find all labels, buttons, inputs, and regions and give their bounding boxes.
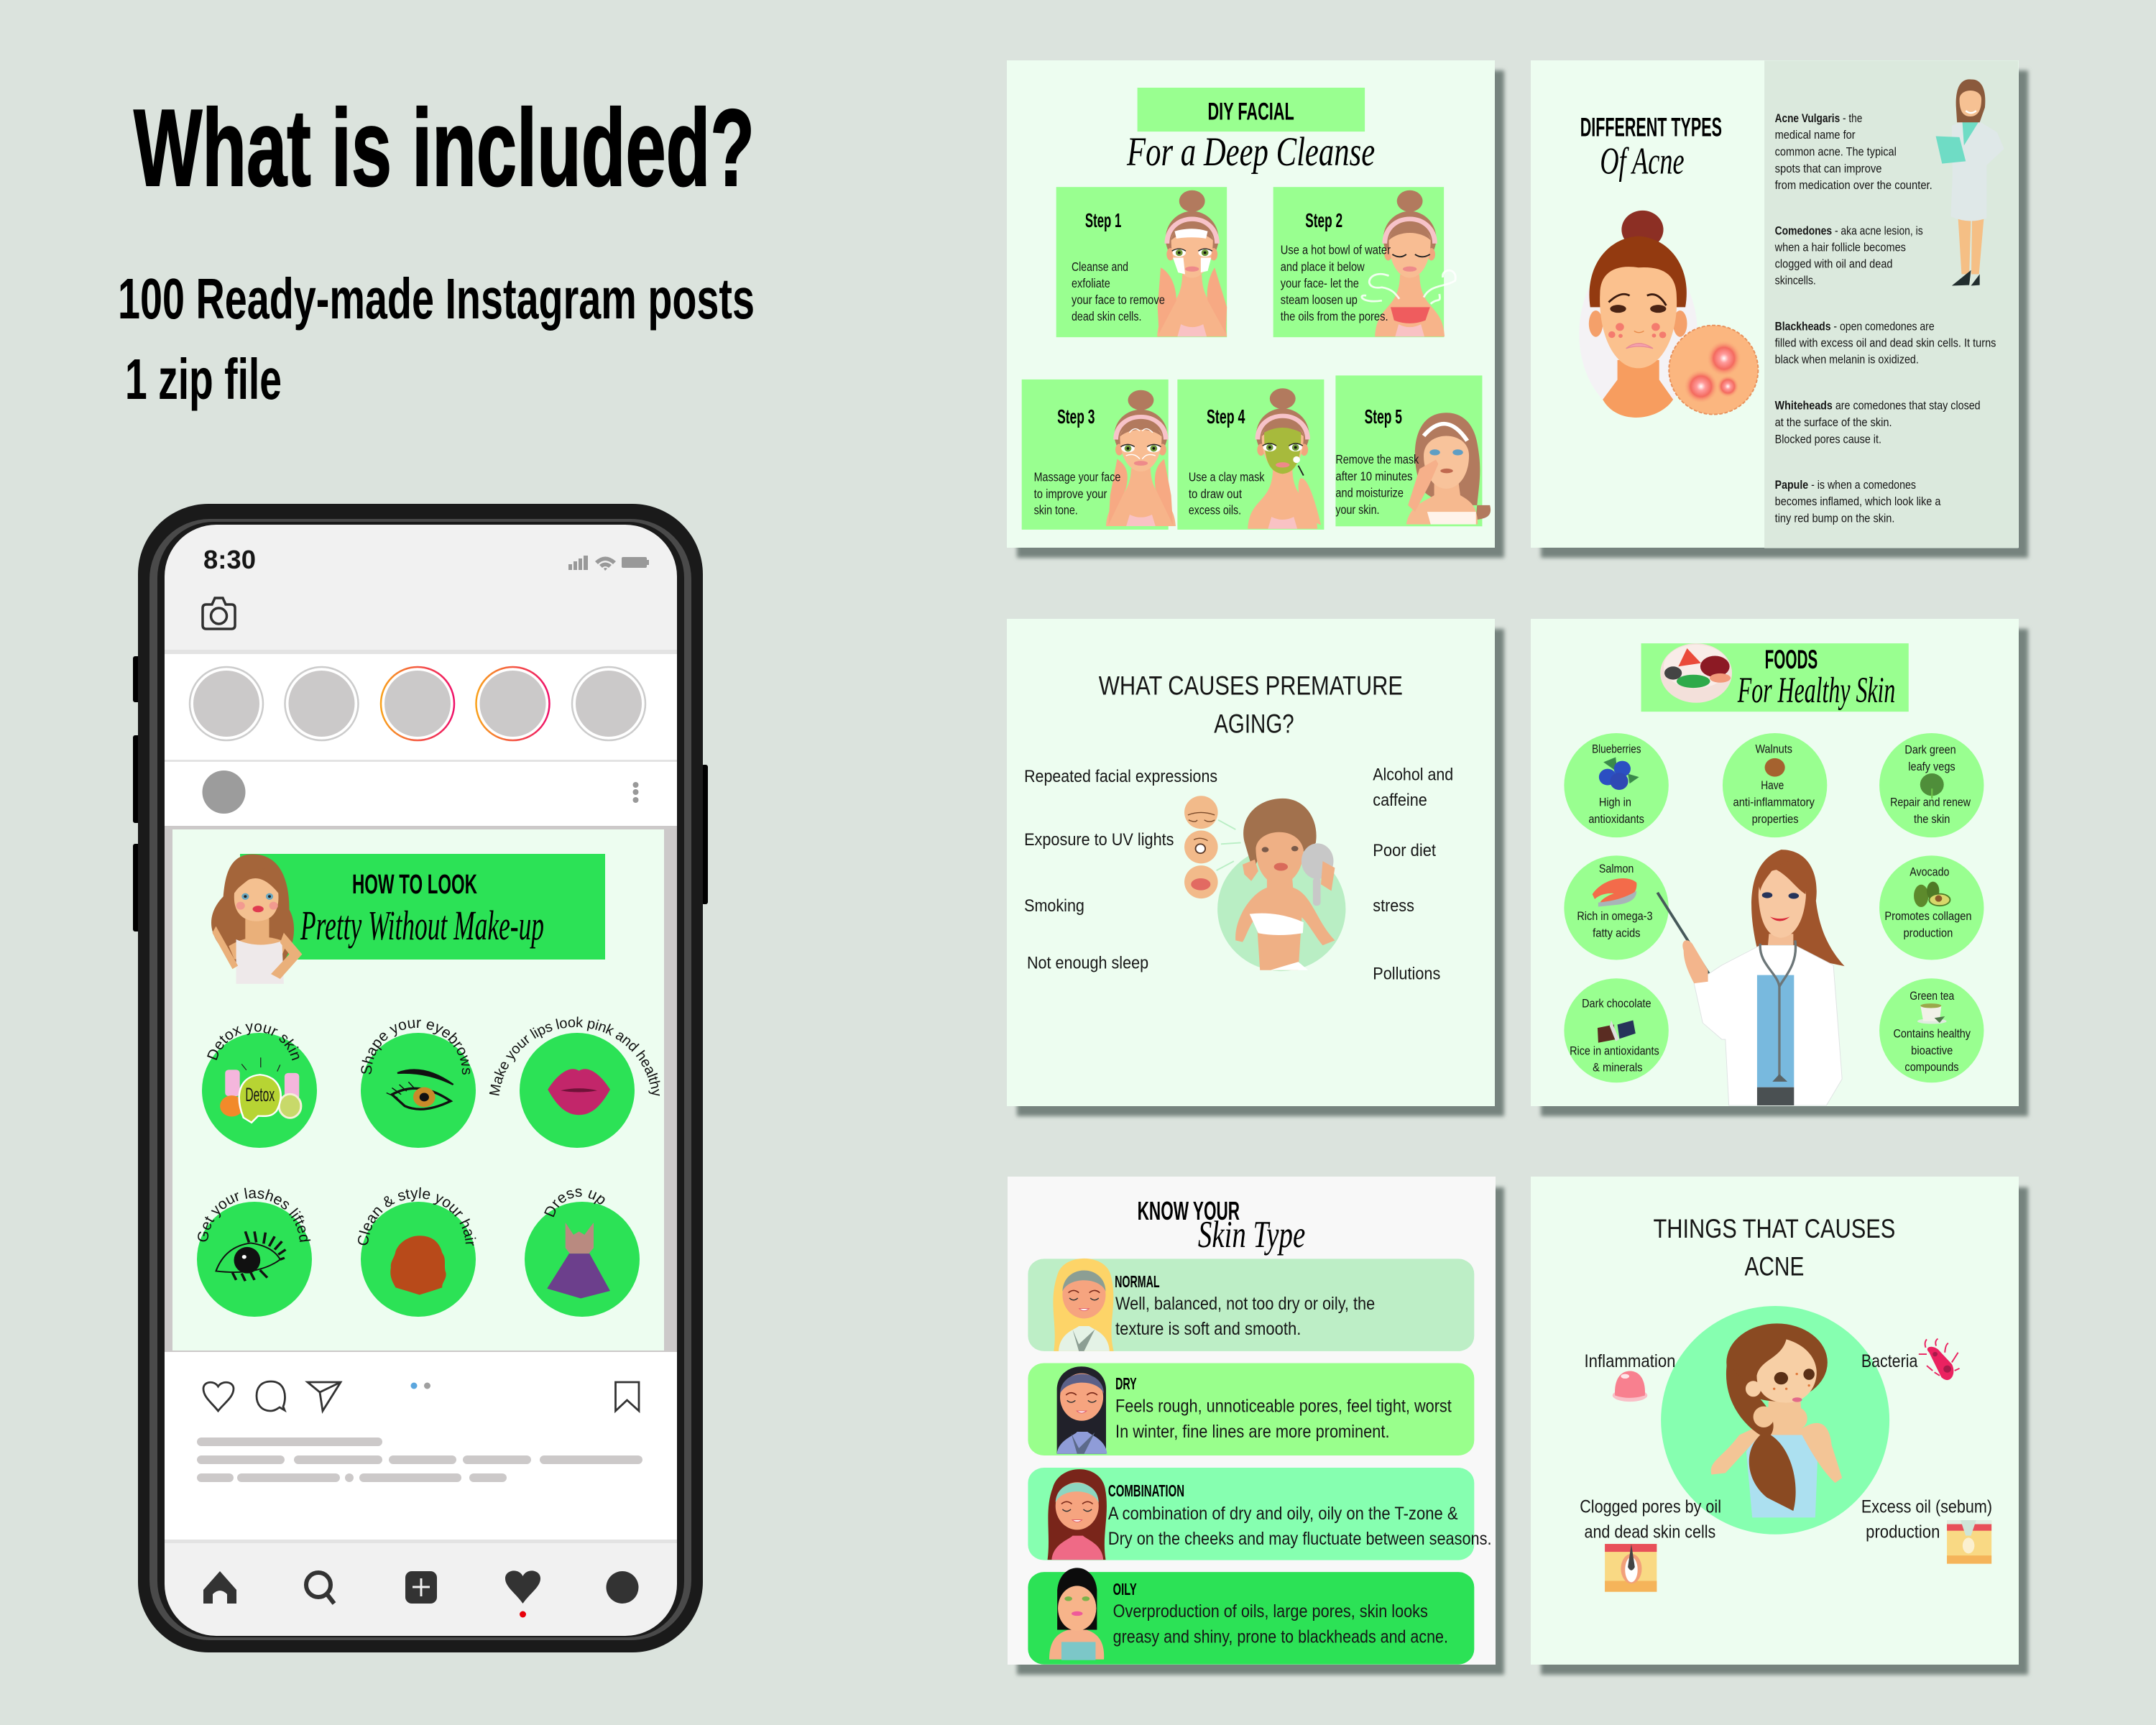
definitions: Blocked pores cause it. xyxy=(1775,433,1881,446)
step 2: and place it below xyxy=(1281,259,1365,274)
panel: things that cause acne xyxy=(1531,1177,2028,1675)
step 5: Step 5 xyxy=(1365,406,1402,428)
step 2: the oils from the pores. xyxy=(1281,310,1388,323)
script heading: For Healthy Skin xyxy=(1737,671,1895,711)
causes left xyxy=(1024,768,1217,972)
step 5: and moisturize xyxy=(1335,486,1404,500)
panel: premature aging xyxy=(1007,619,1504,1116)
definitions: tiny red bump on the skin. xyxy=(1775,512,1894,525)
circle: hair xyxy=(358,1187,476,1317)
food: dark chocolate: Dark chocolate xyxy=(1582,997,1651,1010)
circle: eyebrows xyxy=(361,1019,476,1148)
food: leafy vegs: Dark green xyxy=(1904,743,1956,756)
row: oily: greasy and shiny, prone to blackheads and acne. xyxy=(1113,1627,1448,1647)
subtitle: zip file: 1 zip file xyxy=(125,347,282,411)
food: leafy vegs: Repair and renew xyxy=(1890,796,1971,809)
step 1: Step 1 xyxy=(1085,210,1121,232)
post banner heading: HOW TO LOOK xyxy=(352,870,477,900)
definitions: becomes inflamed, which look like a xyxy=(1775,494,1941,508)
row: dry: Feels rough, unnoticeable pores, feel tight, worst xyxy=(1115,1397,1452,1416)
causes right xyxy=(1373,765,1453,983)
food: blueberries: antioxidants xyxy=(1588,812,1644,826)
illustration: doctor with pointer xyxy=(1657,850,1845,1105)
food: green tea xyxy=(1879,978,1984,1082)
heading: THINGS THAT CAUSES xyxy=(1653,1215,1895,1244)
step 5: after 10 minutes xyxy=(1335,469,1413,483)
circle: dress xyxy=(525,1189,640,1317)
row: normal: NORMAL xyxy=(1115,1273,1160,1292)
cause: bacteria xyxy=(1861,1338,1960,1380)
definitions: clogged with oil and dead xyxy=(1775,257,1892,271)
panel: know your skin type xyxy=(1008,1177,1504,1675)
food: blueberries: Blueberries xyxy=(1592,742,1641,755)
cause: clogged pores: Clogged pores by oil xyxy=(1580,1497,1721,1517)
screen xyxy=(165,525,677,1637)
food: blueberries xyxy=(1564,733,1669,837)
food: avocado: production xyxy=(1904,926,1953,939)
heading: ACNE xyxy=(1744,1253,1804,1282)
food: walnuts: properties xyxy=(1752,812,1799,826)
central circle xyxy=(1661,1306,1889,1535)
heading xyxy=(1099,672,1403,739)
food: salmon: Rich in omega-3 xyxy=(1577,909,1653,923)
row: dry xyxy=(1028,1363,1474,1455)
definitions: common acne. The typical xyxy=(1775,145,1897,158)
food: dark chocolate xyxy=(1564,978,1669,1082)
cause: clogged pores xyxy=(1580,1497,1721,1592)
definitions: filled with excess oil and dead skin cells. It turns xyxy=(1775,336,1996,349)
definitions: Acne Vulgaris - the xyxy=(1775,112,1862,125)
food: avocado: Promotes collagen xyxy=(1884,909,1972,923)
phone mockup xyxy=(133,504,708,1652)
bottom navigation icons xyxy=(203,1570,638,1617)
panel: foods for healthy skin xyxy=(1531,619,2028,1116)
step 2: Use a hot bowl of water xyxy=(1281,243,1391,257)
carousel dots xyxy=(411,1383,430,1389)
circle: lashes: Get your lashes lifted xyxy=(198,1187,310,1242)
row: dry: DRY xyxy=(1115,1376,1137,1394)
food: green tea: Contains healthy xyxy=(1893,1027,1971,1040)
step 3: Step 3 xyxy=(1057,406,1095,428)
post avatar xyxy=(203,770,246,814)
heading: FOODS xyxy=(1765,645,1818,675)
causes right: Poor diet xyxy=(1373,841,1436,860)
right column xyxy=(1764,60,2018,548)
step 2: steam loosen up xyxy=(1281,293,1358,307)
cause: excess oil xyxy=(1861,1497,1992,1564)
row: normal: Well, balanced, not too dry or oily, the xyxy=(1115,1294,1375,1314)
step 4 xyxy=(1177,380,1324,530)
definitions: Papule - is when a comedones xyxy=(1775,478,1916,492)
subtitle: posts count: 100 Ready-made Instagram posts xyxy=(118,267,755,331)
status time: 8:30 xyxy=(203,545,256,574)
step 5: Remove the mask xyxy=(1335,452,1419,466)
row: normal: texture is soft and smooth. xyxy=(1115,1320,1301,1339)
script heading: Of Acne xyxy=(1600,140,1685,182)
heading box xyxy=(1138,88,1365,132)
row: oily: OILY xyxy=(1113,1581,1137,1599)
food: walnuts: Have xyxy=(1761,778,1784,792)
step 4: Step 4 xyxy=(1207,406,1245,428)
food: green tea: bioactive xyxy=(1911,1044,1953,1057)
row: combination: A combination of dry and oily, oily on the T-zone & xyxy=(1108,1504,1458,1524)
caption placeholder bars xyxy=(197,1438,642,1482)
definitions: medical name for xyxy=(1775,129,1856,142)
food: salmon: Salmon xyxy=(1599,862,1634,875)
heading: AGING? xyxy=(1214,709,1294,739)
step 5 xyxy=(1335,375,1491,526)
food: avocado xyxy=(1879,855,1984,960)
food: walnuts: Walnuts xyxy=(1756,742,1792,755)
causes right: Alcohol and xyxy=(1373,765,1453,785)
step 1: dead skin cells. xyxy=(1072,310,1141,323)
food: dark chocolate: Rice in antioxidants xyxy=(1570,1044,1659,1057)
definitions: at the surface of the skin. xyxy=(1775,416,1892,429)
illustration: woman with mirror xyxy=(1184,796,1345,971)
definitions: skincells. xyxy=(1775,274,1816,288)
causes right: stress xyxy=(1373,897,1414,916)
side buttons xyxy=(133,656,708,932)
food: leafy vegs xyxy=(1879,733,1984,837)
cause: inflammation: Inflammation xyxy=(1585,1352,1676,1371)
title: What is included? xyxy=(134,87,755,209)
definitions: spots that can improve xyxy=(1775,162,1881,175)
causes left: Exposure to UV lights xyxy=(1024,831,1174,850)
food: salmon: fatty acids xyxy=(1593,926,1641,939)
food: green tea: compounds xyxy=(1904,1061,1959,1074)
illustration: girl with acne xyxy=(1711,1323,1842,1517)
heading: KNOW YOUR xyxy=(1138,1197,1240,1225)
step 2: Step 2 xyxy=(1305,210,1342,232)
row: oily xyxy=(1028,1568,1474,1665)
cause: excess oil: production xyxy=(1866,1522,1940,1542)
circle: lashes xyxy=(197,1187,312,1317)
food: salmon xyxy=(1564,855,1669,960)
causes right: Pollutions xyxy=(1373,965,1440,983)
food: leafy vegs: the skin xyxy=(1914,812,1950,826)
phone body xyxy=(138,504,703,1652)
step 4: to draw out xyxy=(1189,487,1242,501)
step 1: Cleanse and xyxy=(1072,259,1128,274)
food: walnuts: anti-inflammatory xyxy=(1733,796,1815,809)
step 3: skin tone. xyxy=(1034,503,1078,518)
circle: detox: Detox xyxy=(245,1084,275,1105)
cause: excess oil: Excess oil (sebum) xyxy=(1861,1497,1992,1517)
step 1: your face to remove xyxy=(1072,293,1165,307)
step 2 xyxy=(1273,187,1455,337)
illustration: girl in towel xyxy=(211,854,302,984)
row: combination: COMBINATION xyxy=(1108,1483,1184,1501)
food: dark chocolate: & minerals xyxy=(1593,1061,1642,1075)
post action icons xyxy=(203,1381,639,1411)
row: combination: Dry on the cheeks and may fluctuate between seasons. xyxy=(1108,1530,1492,1549)
panel: different types of acne xyxy=(1531,60,2028,558)
icon: camera xyxy=(203,598,235,629)
step 4: Use a clay mask xyxy=(1189,470,1265,484)
heading: DIY FACIAL xyxy=(1208,97,1294,125)
post banner script: Pretty Without Make-up xyxy=(300,902,544,949)
illustration: acne face xyxy=(1579,211,1758,418)
causes right: caffeine xyxy=(1373,791,1427,810)
causes left: Repeated facial expressions xyxy=(1024,768,1217,786)
step 1: exfoliate xyxy=(1072,276,1110,290)
circle: detox xyxy=(202,1024,317,1148)
food: avocado: Avocado xyxy=(1909,865,1949,878)
script heading: Skin Type xyxy=(1198,1213,1305,1255)
food: walnuts xyxy=(1723,733,1827,837)
definitions: Whiteheads are comedones that stay closed xyxy=(1775,399,1981,413)
banner xyxy=(1641,643,1909,712)
step 3 xyxy=(1022,380,1176,530)
post image xyxy=(172,829,664,1351)
step 3: to improve your xyxy=(1034,487,1107,501)
food: blueberries: High in xyxy=(1599,796,1631,809)
circle: detox: Detox your skin xyxy=(207,1024,299,1061)
row: oily: Overproduction of oils, large pores, skin looks xyxy=(1113,1602,1428,1622)
panel: DIY facial xyxy=(1007,60,1504,558)
row: combination xyxy=(1028,1468,1492,1560)
heading xyxy=(1653,1215,1895,1282)
definitions: Blackheads - open comedones are xyxy=(1775,320,1935,333)
row: dry: In winter, fine lines are more prominent. xyxy=(1115,1422,1390,1442)
cause: clogged pores: and dead skin cells xyxy=(1585,1522,1715,1542)
post menu dots xyxy=(632,782,638,803)
illustration: doctor xyxy=(1936,79,2004,286)
definitions: black when melanin is oxidized. xyxy=(1775,353,1919,366)
circle: dress: Dress up xyxy=(544,1189,605,1218)
cause: inflammation xyxy=(1585,1352,1676,1402)
definitions: from medication over the counter. xyxy=(1775,178,1932,192)
definitions: when a hair follicle becomes xyxy=(1774,241,1906,254)
food: leafy vegs: leafy vegs xyxy=(1908,760,1955,773)
icon: bowl xyxy=(1660,643,1732,703)
causes left: Smoking xyxy=(1024,897,1084,916)
heading: WHAT CAUSES PREMATURE xyxy=(1099,672,1403,701)
post banner xyxy=(240,854,605,960)
circle: eyebrows: Shape your eyebrows xyxy=(361,1019,470,1075)
definitions xyxy=(1774,112,1996,525)
step 1 xyxy=(1056,187,1227,337)
script heading: For a Deep Cleanse xyxy=(1126,128,1375,175)
circle: lips: Make your lips look pink and healthy xyxy=(489,1016,660,1096)
circle: hair: Clean & style your hair xyxy=(358,1187,476,1246)
step 2: your face- let the xyxy=(1281,276,1359,290)
food: green tea: Green tea xyxy=(1909,989,1955,1003)
circle: lips xyxy=(489,1016,660,1148)
cause: bacteria: Bacteria xyxy=(1861,1352,1918,1371)
status icons xyxy=(568,556,649,571)
causes left: Not enough sleep xyxy=(1027,954,1148,972)
step 3: Massage your face xyxy=(1034,470,1120,484)
step 5: your skin. xyxy=(1335,502,1379,517)
step 4: excess oils. xyxy=(1189,503,1241,518)
heading: DIFFERENT TYPES xyxy=(1580,113,1722,142)
stories row xyxy=(190,667,645,740)
definitions: Comedones - aka acne lesion, is xyxy=(1775,224,1923,237)
row: normal xyxy=(1028,1259,1474,1351)
